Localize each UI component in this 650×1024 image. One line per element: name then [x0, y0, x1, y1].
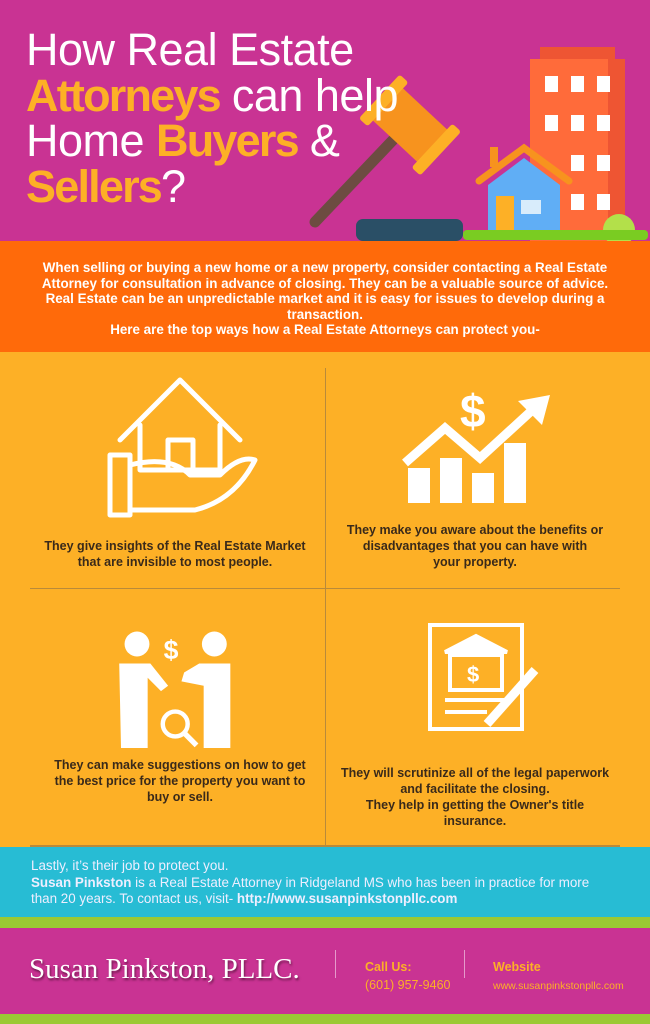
title: Home Buyers & [26, 115, 339, 166]
intro text panel [0, 241, 650, 352]
footer website: Website [493, 960, 541, 974]
title: Attorneys can help [26, 70, 398, 120]
footer call: (601) 957-9460 [365, 978, 450, 992]
quadrant 3: icon people: $ [164, 635, 179, 665]
footer website: www.susanpinkstonpllc.com [493, 980, 624, 992]
quadrant 3: icon people [119, 632, 230, 748]
quadrant 3 text: buy or sell. [147, 790, 213, 804]
quadrant 1 text: They give insights of the Real Estate Market [44, 539, 306, 553]
title: Sellers? [26, 160, 186, 212]
quadrant 4: icon document [428, 623, 538, 731]
intro text panel: When selling or buying a new home or a new property, consider contacting a Real Estate Attorney for consultation in advance of closing. They can be a valuable source of advice. Real Estate can be an unpredictable market and it is easy for issues to develop during a transaction. [42, 260, 608, 322]
quadrant 4 text: They help in getting the Owner's title [366, 798, 584, 812]
header panel [0, 0, 650, 241]
quadrant 2 text [347, 523, 603, 569]
title: How Real Estate [26, 24, 354, 75]
quadrant 4: icon document: $ [467, 662, 479, 687]
illustration: gavel, house, building [310, 47, 648, 241]
closing text panel: Lastly, it’s their job to protect you. [31, 858, 228, 873]
closing text panel: Susan Pinkston is a Real Estate Attorney in Ridgeland MS who has been in practice for more than 20 years. To contact us, visit- http://www.susanpinkstonpllc.com [31, 874, 589, 906]
quadrant 1 text [44, 539, 306, 569]
quadrant 2 text: your property. [433, 555, 517, 569]
footer panel [0, 928, 650, 1014]
quadrant 2 text: They make you aware about the benefits or [347, 523, 603, 537]
quadrant 4 text [341, 766, 609, 828]
intro text panel: Here are the top ways how a Real Estate Attorneys can protect you- [110, 322, 540, 337]
footer brand: Susan Pinkston, PLLC. [29, 953, 300, 985]
quadrant 1 text: that are invisible to most people. [78, 555, 272, 569]
footer call: Call Us: [365, 960, 412, 974]
quadrant 2: icon growth chart [402, 385, 550, 503]
quadrant 3 text: They can make suggestions on how to get [54, 758, 306, 772]
quadrant 3 text [54, 758, 306, 804]
quadrant 2 text: disadvantages that you can have with [363, 539, 587, 553]
quadrant 4 text: and facilitate the closing. [400, 782, 550, 796]
footer website [493, 960, 624, 992]
quadrant 2: icon growth chart: $ [460, 385, 486, 437]
title [26, 24, 398, 212]
closing text panel [0, 847, 650, 917]
quadrant 1: icon hand house [108, 378, 258, 518]
footer call [365, 960, 450, 992]
quadrant 4 text: They will scrutinize all of the legal paperwork [341, 766, 609, 780]
quadrant 3 text: the best price for the property you want to [55, 774, 305, 788]
quadrant 4 text: insurance. [444, 814, 506, 828]
